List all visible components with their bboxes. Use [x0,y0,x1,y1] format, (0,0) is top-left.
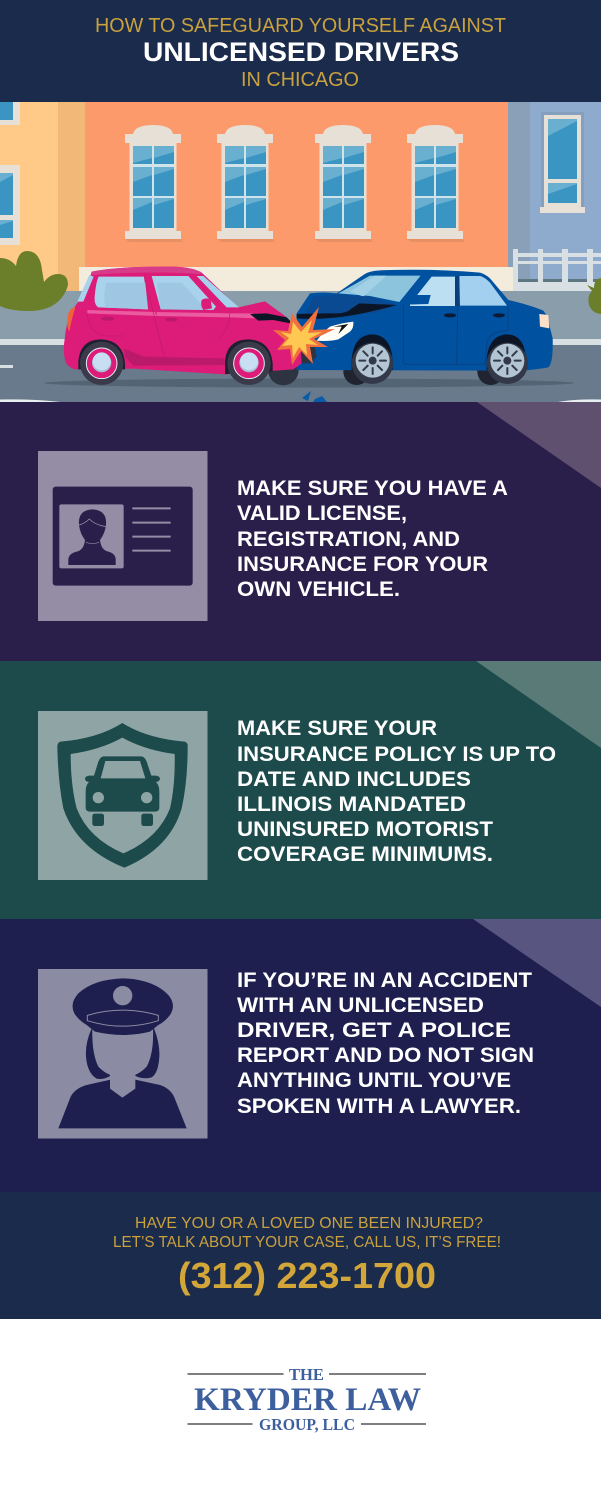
text: insurance policy [237,716,556,866]
logo: The Kryder Law Group: KRYDER LAW [194,1382,421,1418]
logo: The Kryder Law Group [188,1365,426,1434]
text: police report: ANYTHING UNTIL YOU’VE [237,1068,511,1092]
crash scene illustration [0,102,601,402]
phone number: (312) 223-1700 [178,1255,436,1296]
bushes [0,251,601,314]
text: insurance policy: DATE AND INCLUDES [237,767,471,791]
title line 3: IN CHICAGO [241,69,359,91]
text: insurance policy: MAKE SURE YOUR [237,716,437,740]
text: valid license [237,476,508,601]
text: insurance policy: INSURANCE POLICY IS UP TO [237,742,556,766]
text: valid license: INSURANCE FOR YOUR [237,552,488,576]
text: insurance policy: ILLINOIS MANDATED [237,792,466,816]
text: valid license: OWN VEHICLE. [237,577,400,601]
text: valid license: REGISTRATION, AND [237,527,460,551]
text: police report: IF YOU’RE IN AN ACCIDENT [237,968,532,992]
ground shadow [44,378,574,388]
text: valid license: VALID LICENSE, [237,501,407,525]
glass shards [302,391,327,402]
icon: police officer [38,969,208,1138]
pink car [64,267,302,385]
text: insurance policy: COVERAGE MINIMUMS. [237,842,493,866]
text: police report [237,968,534,1118]
text: valid license: MAKE SURE YOU HAVE A [237,476,508,500]
call to action text: LET’S TALK ABOUT YOUR CASE, CALL US, IT’S FREE! [113,1234,501,1251]
call to action text [113,1215,501,1251]
panel: insurance policy [0,661,601,919]
text: police report: SPOKEN WITH A LAWYER. [237,1094,521,1118]
header panel [0,0,601,102]
fence [513,249,601,291]
text: insurance policy: UNINSURED MOTORIST [237,817,493,841]
call to action text: HAVE YOU OR A LOVED ONE BEEN INJURED? [135,1215,483,1232]
call to action panel [0,1192,601,1319]
icon: shield with car [38,711,208,880]
panel: police report [0,919,601,1192]
title main: UNLICENSED DRIVERS [143,37,459,67]
text: police report: REPORT AND DO NOT SIGN [237,1043,534,1067]
text: police report: DRIVER, GET A POLICE [237,1018,511,1042]
right building window [540,112,585,213]
title line 1: HOW TO SAFEGUARD YOURSELF AGAINST [95,15,506,37]
logo: The Kryder Law Group: GROUP, LLC [259,1415,355,1434]
arched windows [125,125,465,242]
blue car [268,270,553,385]
logo: The Kryder Law Group: THE [289,1365,324,1384]
left building windows [0,102,20,245]
crash explosion [273,307,335,365]
text: police report: WITH AN UNLICENSED [237,993,484,1017]
icon: ID card [38,451,208,621]
panel: valid license [0,402,601,661]
